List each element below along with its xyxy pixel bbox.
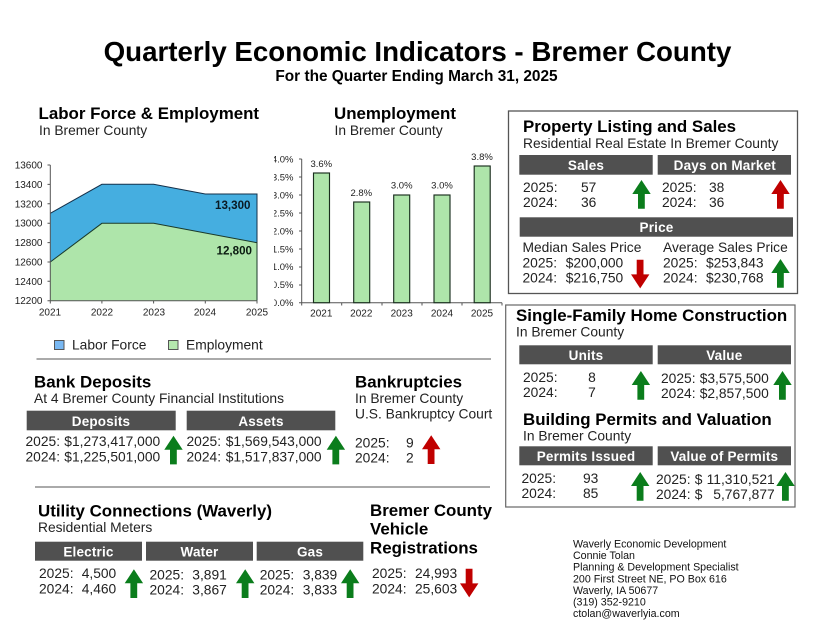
heading: property: Property Listing and Sales bbox=[523, 117, 736, 136]
heading: property bbox=[523, 117, 778, 151]
header: permits issued: Permits Issued bbox=[537, 449, 635, 464]
header: permits issued bbox=[519, 446, 653, 465]
heading: bank deposits: Bank Deposits bbox=[34, 372, 151, 391]
header: units: Units bbox=[569, 348, 603, 363]
days on market values: 38 bbox=[709, 180, 725, 195]
vehicle values: 2025: bbox=[372, 566, 407, 581]
bar chart: unemployment: 3.8% bbox=[471, 152, 493, 163]
deposits values bbox=[26, 434, 161, 464]
electric values: 2025: bbox=[39, 566, 74, 581]
bar chart: unemployment: 4.0% bbox=[272, 154, 294, 166]
legend: Employment bbox=[186, 338, 263, 353]
water values bbox=[150, 567, 227, 598]
sales values: 36 bbox=[581, 195, 597, 210]
area chart: labor force and employment: 2022 bbox=[91, 308, 114, 318]
panel: labor force and employment bbox=[15, 104, 269, 353]
average sales price bbox=[663, 240, 788, 286]
days on market values: 2025: bbox=[662, 180, 697, 195]
panel: unemployment bbox=[272, 104, 502, 319]
icon: up arrow water bbox=[236, 569, 254, 598]
median sales price: $200,000 bbox=[566, 256, 624, 271]
value of permits values bbox=[656, 472, 775, 502]
median sales price: $216,750 bbox=[566, 271, 624, 286]
units values: 2025: bbox=[523, 370, 558, 385]
area chart: labor force and employment: 13000 bbox=[15, 219, 43, 230]
gas values: 2025: bbox=[260, 567, 294, 582]
area chart: labor force and employment: 13600 bbox=[15, 160, 43, 172]
bankruptcies values: 2024: bbox=[355, 451, 390, 466]
days on market values: 36 bbox=[709, 195, 725, 210]
median sales price: 2024: bbox=[522, 271, 557, 286]
heading: vehicle registrations: Bremer County bbox=[370, 501, 493, 520]
header: value of permits bbox=[658, 446, 791, 465]
icon: down arrow vehicles bbox=[460, 569, 478, 597]
bankruptcies values: 2025: bbox=[355, 435, 390, 450]
bankruptcies values bbox=[355, 435, 414, 466]
electric values: 2024: bbox=[39, 581, 74, 596]
heading: bankruptcies bbox=[355, 372, 492, 422]
heading: vehicle registrations: Registrations bbox=[370, 538, 478, 557]
heading: single-family: In Bremer County bbox=[516, 325, 624, 340]
header: units bbox=[519, 345, 653, 364]
legend: Labor Force bbox=[72, 338, 147, 353]
heading: single-family: Single-Family Home Construction bbox=[516, 306, 787, 325]
area chart: labor force and employment: 13200 bbox=[15, 199, 43, 210]
permits values: 85 bbox=[583, 486, 599, 501]
permits values: 93 bbox=[583, 471, 599, 486]
permits values: 2024: bbox=[522, 486, 556, 501]
vehicle values: 24,993 bbox=[415, 566, 458, 581]
gas values bbox=[260, 567, 338, 598]
deposits values: $1,273,417,000 bbox=[64, 434, 161, 449]
construction values: $2,857,500 bbox=[700, 386, 769, 401]
water values: 2024: bbox=[150, 582, 184, 598]
construction values: 2025: bbox=[661, 371, 696, 386]
icon: up arrow electric bbox=[125, 569, 143, 598]
panel: utility connections bbox=[35, 502, 363, 598]
units values: 7 bbox=[588, 385, 596, 400]
heading: bankruptcies: Bankruptcies bbox=[355, 372, 462, 391]
assets values: 2025: bbox=[186, 434, 221, 449]
header: assets: Assets bbox=[238, 414, 284, 429]
value of permits values: $ bbox=[695, 472, 703, 487]
icon: up arrow assets bbox=[327, 436, 345, 464]
bar chart: unemployment: 3.0% bbox=[391, 181, 413, 192]
area chart: labor force and employment: 12800 bbox=[15, 238, 43, 249]
value of permits values: 11,310,521 bbox=[707, 472, 775, 487]
heading: single-family bbox=[516, 306, 787, 340]
contact block bbox=[573, 538, 739, 620]
heading: labor force bbox=[38, 104, 259, 138]
vehicle values: 25,603 bbox=[415, 581, 458, 596]
header: water: Water bbox=[181, 544, 219, 560]
header: days on market: Days on Market bbox=[674, 158, 776, 173]
permits values: 2025: bbox=[522, 471, 556, 486]
header: sales: Sales bbox=[568, 158, 604, 173]
area chart: labor force and employment: 2025 bbox=[246, 308, 269, 318]
heading: unemployment: Unemployment bbox=[334, 104, 456, 123]
water values: 3,867 bbox=[192, 582, 227, 598]
area chart: labor force and employment: 13400 bbox=[15, 180, 43, 191]
bar chart: unemployment: 0.5% bbox=[272, 280, 294, 291]
construction values: $3,575,500 bbox=[700, 371, 769, 386]
bar chart: unemployment: 2023 bbox=[391, 308, 413, 319]
electric values: 4,500 bbox=[82, 566, 117, 581]
heading: building permits: Building Permits and Valuation bbox=[523, 410, 772, 429]
deposits values: $1,225,501,000 bbox=[64, 449, 161, 464]
bar chart: unemployment: 2.5% bbox=[272, 208, 294, 220]
bar chart: unemployment: 1.5% bbox=[272, 244, 294, 255]
heading: unemployment: In Bremer County bbox=[334, 123, 443, 138]
icon: up arrow gas bbox=[341, 569, 359, 598]
contact block: Waverly, IA 50677 bbox=[573, 585, 658, 597]
heading: building permits bbox=[523, 410, 772, 443]
icon: up arrow value of permits bbox=[776, 472, 795, 501]
heading: utility: Residential Meters bbox=[38, 520, 152, 535]
bar chart: unemployment: 3.6% bbox=[310, 159, 333, 170]
title: Quarterly Economic Indicators - Bremer County bbox=[104, 36, 732, 67]
bar chart: unemployment: 2.8% bbox=[350, 188, 373, 199]
icon: up arrow sales bbox=[632, 180, 651, 209]
header: sales bbox=[519, 155, 653, 175]
heading: labor force: Labor Force & Employment bbox=[38, 104, 259, 123]
heading: unemployment bbox=[334, 104, 456, 138]
heading: labor force: In Bremer County bbox=[39, 123, 147, 138]
icon: up arrow value bbox=[773, 371, 792, 400]
icon: up arrow deposits bbox=[164, 436, 183, 464]
header: electric: Electric bbox=[63, 544, 114, 560]
heading: vehicle registrations bbox=[370, 501, 493, 557]
heading: bank deposits bbox=[34, 372, 284, 406]
heading: utility bbox=[38, 502, 272, 535]
title bbox=[104, 36, 732, 85]
construction values: 2024: bbox=[661, 386, 696, 401]
contact block: Waverly Economic Development bbox=[573, 538, 726, 550]
bankruptcies values: 2 bbox=[406, 451, 414, 466]
contact block: Connie Tolan bbox=[573, 550, 635, 562]
icon: red up arrow days on market bbox=[771, 180, 790, 209]
value of permits values: 5,767,877 bbox=[713, 487, 775, 502]
gas values: 3,839 bbox=[303, 567, 338, 582]
average sales price: 2024: bbox=[663, 271, 698, 286]
bar chart: unemployment: 3.5% bbox=[272, 172, 294, 184]
days on market values: 2024: bbox=[662, 195, 697, 210]
header: water bbox=[146, 542, 253, 561]
bar chart: unemployment: 2.0% bbox=[272, 226, 294, 237]
panel: vehicle registrations bbox=[370, 501, 493, 597]
panel: property listing and sales bbox=[508, 111, 798, 294]
legend bbox=[54, 338, 263, 353]
water values: 3,891 bbox=[192, 567, 227, 582]
header: value: Value bbox=[706, 348, 743, 363]
sales values: 2024: bbox=[523, 195, 558, 210]
header: electric bbox=[35, 542, 142, 561]
header: value bbox=[658, 345, 791, 364]
area chart: labor force and employment: 2024 bbox=[194, 308, 217, 318]
bar chart: unemployment: 2022 bbox=[350, 308, 373, 319]
area chart: labor force and employment: 12600 bbox=[15, 258, 43, 268]
value of permits values: 2024: bbox=[656, 487, 691, 502]
assets values: $1,569,543,000 bbox=[226, 434, 322, 449]
icon: down arrow median price bbox=[631, 260, 649, 288]
average sales price: 2025: bbox=[663, 256, 698, 271]
header: deposits bbox=[27, 411, 176, 430]
bar chart: unemployment: 0.0% bbox=[272, 298, 294, 309]
sales values bbox=[523, 180, 597, 210]
assets values bbox=[186, 434, 322, 464]
units values: 2024: bbox=[523, 385, 558, 400]
vehicle values bbox=[372, 566, 458, 596]
header: value of permits: Value of Permits bbox=[670, 449, 778, 464]
electric values bbox=[39, 566, 117, 596]
area chart: labor force and employment: 2023 bbox=[143, 308, 166, 318]
area chart: labor force and employment: 12,800 bbox=[216, 245, 252, 258]
heading: bankruptcies: U.S. Bankruptcy Court bbox=[355, 407, 492, 422]
header: gas bbox=[257, 542, 363, 561]
panel: bank deposits bbox=[26, 372, 345, 464]
heading: property: Residential Real Estate In Bremer County bbox=[523, 136, 778, 151]
units values: 8 bbox=[588, 370, 596, 385]
icon: up arrow average price bbox=[771, 259, 790, 288]
sales values: 2025: bbox=[523, 180, 558, 195]
area chart: labor force and employment: 12200 bbox=[15, 296, 43, 307]
icon: up arrow permits bbox=[631, 472, 649, 501]
heading: bank deposits: At 4 Bremer County Financial Institutions bbox=[34, 391, 284, 406]
median sales price: Median Sales Price bbox=[522, 240, 642, 255]
heading: vehicle registrations: Vehicle bbox=[370, 520, 428, 539]
header: gas: Gas bbox=[297, 544, 323, 560]
construction values bbox=[661, 371, 769, 401]
electric values: 4,460 bbox=[82, 581, 117, 596]
deposits values: 2024: bbox=[26, 449, 60, 464]
heading: building permits: In Bremer County bbox=[523, 428, 631, 443]
deposits values: 2025: bbox=[26, 434, 60, 449]
heading: bankruptcies: In Bremer County bbox=[355, 391, 463, 406]
header: days on market bbox=[658, 155, 791, 175]
water values: 2025: bbox=[150, 567, 184, 582]
contact block: ctolan@waverlyia.com bbox=[573, 608, 680, 620]
average sales price: $253,843 bbox=[706, 256, 764, 271]
area chart: labor force and employment: 2021 bbox=[39, 308, 62, 318]
assets values: $1,517,837,000 bbox=[226, 449, 322, 464]
bar chart: unemployment bbox=[272, 152, 502, 319]
days on market values bbox=[662, 180, 725, 210]
units values bbox=[523, 370, 596, 400]
permits values bbox=[522, 471, 599, 501]
icon: up arrow units bbox=[632, 371, 650, 400]
header: assets bbox=[187, 411, 335, 430]
average sales price: Average Sales Price bbox=[663, 240, 788, 255]
gas values: 3,833 bbox=[303, 582, 338, 598]
header: price bbox=[520, 217, 793, 237]
assets values: 2024: bbox=[186, 449, 221, 464]
panel: bankruptcies bbox=[355, 372, 492, 466]
value of permits values: 2025: bbox=[656, 472, 691, 487]
title: For the Quarter Ending March 31, 2025 bbox=[275, 68, 558, 85]
gas values: 2024: bbox=[260, 582, 294, 598]
bar chart: unemployment: 2024 bbox=[431, 308, 454, 319]
bar chart: unemployment: 1.0% bbox=[272, 262, 294, 273]
average sales price: $230,768 bbox=[706, 271, 764, 286]
contact block: 200 First Street NE, PO Box 616 bbox=[573, 573, 727, 585]
area chart: labor force and employment: 13,300 bbox=[215, 199, 250, 212]
vehicle values: 2024: bbox=[372, 581, 407, 596]
bar chart: unemployment: 3.0% bbox=[431, 181, 453, 192]
area chart: labor force and employment bbox=[15, 160, 269, 318]
bankruptcies values: 9 bbox=[406, 435, 414, 450]
contact block: (319) 352-9210 bbox=[573, 596, 646, 608]
median sales price bbox=[522, 240, 642, 286]
area chart: labor force and employment: 12400 bbox=[15, 277, 43, 288]
median sales price: 2025: bbox=[522, 256, 557, 271]
icon: red up arrow bankruptcies bbox=[422, 435, 440, 464]
bar chart: unemployment: 2025 bbox=[471, 308, 494, 319]
heading: utility: Utility Connections (Waverly) bbox=[38, 502, 272, 521]
sales values: 57 bbox=[581, 180, 596, 195]
bar chart: unemployment: 3.0% bbox=[272, 190, 294, 202]
value of permits values: $ bbox=[695, 487, 703, 502]
header: deposits: Deposits bbox=[72, 414, 130, 429]
contact block: Planning & Development Specialist bbox=[573, 562, 739, 574]
header: price: Price bbox=[640, 220, 674, 235]
panel: home construction and permits bbox=[506, 305, 795, 507]
bar chart: unemployment: 2021 bbox=[310, 308, 333, 319]
